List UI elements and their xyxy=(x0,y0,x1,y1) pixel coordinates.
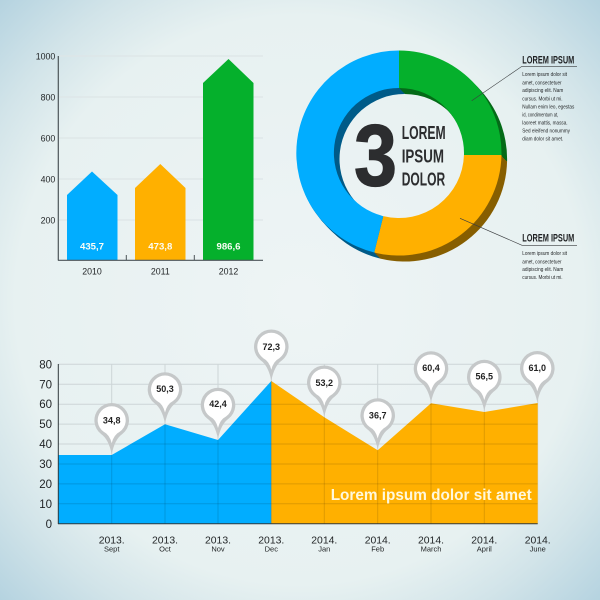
area x-axis year labels: 2014. xyxy=(365,535,391,546)
callout: lower xyxy=(460,218,577,281)
pin: June 61,0: 61,0 xyxy=(529,363,546,373)
area y-axis labels: 80 xyxy=(39,359,52,371)
callout: upper: Nullam enim leo, egestas xyxy=(522,104,574,110)
pin: March 60,4: 60,4 xyxy=(422,363,440,373)
donut centre text: LOREM xyxy=(402,123,446,143)
callout: upper: laoreet mattis, massa. xyxy=(522,120,568,126)
panel: bar chart xyxy=(36,51,263,276)
area x-axis month labels: Oct xyxy=(159,545,172,554)
area y-axis labels: 10 xyxy=(39,499,52,511)
area y-axis labels: 40 xyxy=(39,439,52,451)
area y-axis labels: 60 xyxy=(39,399,52,411)
area x-axis month labels: Nov xyxy=(211,545,225,554)
area y-axis labels: 70 xyxy=(39,379,52,391)
callout: lower: cursus. Morbi ut mi. xyxy=(522,275,563,281)
pin: Jan 53,2: 53,2 xyxy=(316,378,333,388)
area y-axis labels: 30 xyxy=(39,459,52,471)
donut centre number: 3 xyxy=(354,107,397,204)
donut segment: orange xyxy=(374,155,501,256)
bar y-axis labels xyxy=(36,51,55,225)
callout: upper: id, condimentum at, xyxy=(522,112,559,118)
pin: April 56,5 xyxy=(467,360,502,411)
pin: Feb 36,7 xyxy=(360,398,395,450)
pin: Oct 50,3 xyxy=(148,372,182,424)
callout: lower: amet, consectetuer xyxy=(522,259,562,265)
donut centre text xyxy=(402,123,446,189)
pin: Oct 50,3: 50,3 xyxy=(156,384,174,394)
bar y-axis labels: 1000 xyxy=(36,51,55,61)
area x-axis month labels: March xyxy=(421,545,441,554)
donut extrusion xyxy=(297,51,507,262)
pin: Dec 72,3 xyxy=(254,329,289,381)
bar value labels: 435,7 xyxy=(80,242,104,253)
bar value labels: 473,8 xyxy=(148,242,173,253)
bar: 2010 blue arrow xyxy=(67,172,118,260)
bar x-axis labels: 2010 xyxy=(82,266,102,276)
pin: Nov 42,4: 42,4 xyxy=(209,399,227,409)
area chart caption: Lorem ipsum dolor sit amet xyxy=(331,487,532,504)
area chart axes xyxy=(58,364,538,524)
area y-axis labels: 20 xyxy=(39,479,52,491)
area x-axis year labels: 2014. xyxy=(311,535,337,546)
area x-axis year labels xyxy=(99,535,551,546)
area y-axis labels: 50 xyxy=(39,419,52,431)
pin: Dec 72,3: 72,3 xyxy=(263,342,280,352)
pin: Sept 34,8 xyxy=(94,403,129,454)
callout: upper xyxy=(472,54,577,142)
donut segment: blue xyxy=(296,50,399,252)
pin: Jan 53,2 xyxy=(307,365,342,417)
bar y-axis labels: 600 xyxy=(41,133,55,143)
bar y-axis labels: 200 xyxy=(41,215,55,225)
bar y-axis labels: 400 xyxy=(41,174,55,184)
area x-axis month labels xyxy=(104,545,546,554)
donut centre text: DOLOR xyxy=(402,169,445,189)
callout: lower: LOREM IPSUM xyxy=(522,233,574,245)
donut segment: green xyxy=(399,50,501,155)
bar axes xyxy=(58,56,263,260)
bar value labels: 986,6 xyxy=(216,242,241,253)
pin: March 60,4 xyxy=(414,351,448,402)
area x-axis month labels: Dec xyxy=(265,545,278,554)
area x-axis month labels: Feb xyxy=(371,545,384,554)
bar y-axis labels: 800 xyxy=(41,92,55,102)
bar: 2012 green arrow xyxy=(203,59,254,260)
area x-axis year labels: 2014. xyxy=(471,535,497,546)
area y-axis labels xyxy=(39,359,52,531)
bar x-axis labels: 2012 xyxy=(219,266,238,276)
area x-axis month labels: Sept xyxy=(104,545,120,554)
donut centre text: IPSUM xyxy=(402,146,444,166)
pin: June 61,0 xyxy=(520,351,555,402)
callout: upper: cursus. Morbi ut mi. xyxy=(522,96,563,102)
area x-axis year labels: 2013. xyxy=(258,535,284,546)
panel: donut chart xyxy=(296,50,507,262)
area x-axis month labels: June xyxy=(530,545,546,554)
callout: upper: Lorem ipsum dolor sit xyxy=(522,72,567,78)
bar value labels xyxy=(80,242,241,253)
bar x-axis labels xyxy=(82,266,238,276)
area: blue 2013 xyxy=(58,381,271,524)
area: orange 2014 xyxy=(271,381,538,524)
callout: upper: Sed eleifend nonummy xyxy=(522,129,570,135)
callout: lower: adipiscing elit. Nam xyxy=(522,267,563,273)
pin: Nov 42,4 xyxy=(201,388,235,439)
callout: lower: Lorem ipsum dolor sit xyxy=(522,251,567,257)
area x-axis year labels: 2013. xyxy=(99,535,125,546)
callout: upper: amet, consectetuer xyxy=(522,80,562,86)
callout: upper: LOREM IPSUM xyxy=(522,54,574,66)
bar: 2011 orange arrow xyxy=(135,164,186,260)
area x-axis year labels: 2013. xyxy=(205,535,231,546)
pin: Sept 34,8: 34,8 xyxy=(103,415,120,425)
area x-axis year labels: 2014. xyxy=(525,535,551,546)
area y-axis labels: 0 xyxy=(46,519,52,531)
area x-axis year labels: 2013. xyxy=(152,535,178,546)
pin: April 56,5: 56,5 xyxy=(476,372,493,382)
callout: upper: adipiscing elit. Nam xyxy=(522,88,563,94)
area x-axis month labels: Jan xyxy=(318,545,330,554)
bar x-axis labels: 2011 xyxy=(151,266,170,276)
callout: upper: diam dolor sit amet. xyxy=(522,136,564,142)
area x-axis month labels: April xyxy=(477,545,492,554)
area x-axis year labels: 2014. xyxy=(418,535,444,546)
pin: Feb 36,7: 36,7 xyxy=(369,410,386,420)
panel: area chart xyxy=(39,359,551,554)
